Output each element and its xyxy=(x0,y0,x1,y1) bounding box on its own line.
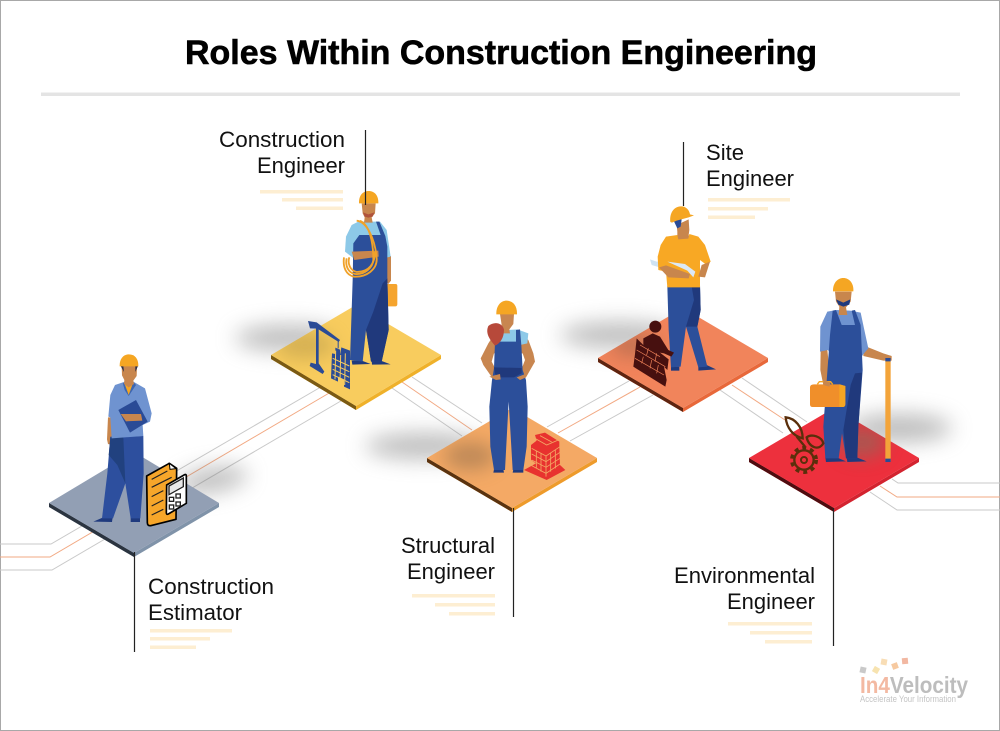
icon: document and calculator xyxy=(147,463,186,526)
figure: structural engineer xyxy=(481,301,535,473)
label: structural engineer: Engineer xyxy=(407,559,495,584)
label: construction estimator: Construction xyxy=(148,574,274,599)
logo: In4Velocity xyxy=(859,658,968,705)
label: site engineer: Engineer xyxy=(706,166,794,191)
soft drop shadows behind platforms xyxy=(174,322,952,498)
title divider xyxy=(41,92,960,96)
figure: construction engineer xyxy=(344,191,397,365)
platform: construction engineer xyxy=(271,305,441,410)
platform: structural engineer xyxy=(427,408,597,512)
icon: brick building xyxy=(524,433,565,480)
figure: environmental engineer xyxy=(810,278,892,462)
figure: site engineer xyxy=(650,206,716,371)
platform: environmental engineer xyxy=(749,408,919,512)
label: structural engineer xyxy=(401,508,514,617)
label: construction engineer xyxy=(219,127,366,210)
label: environmental engineer: Environmental xyxy=(674,563,815,588)
connector circuit lines xyxy=(0,377,1000,570)
title: Roles Within Construction Engineering xyxy=(185,34,817,72)
icon: crane and tower xyxy=(308,321,350,389)
figure: construction estimator xyxy=(93,354,152,522)
label: construction estimator xyxy=(134,552,274,652)
icon: gear and leaf xyxy=(786,417,823,472)
label: environmental engineer: Engineer xyxy=(727,589,815,614)
logo: In4Velocity: Accelerate Your Information xyxy=(860,694,956,705)
platform: estimator xyxy=(49,452,219,557)
label: site engineer: Site xyxy=(706,140,744,165)
icon: bricklayer wall xyxy=(633,321,674,387)
label: environmental engineer xyxy=(674,508,834,646)
label: site engineer xyxy=(684,140,794,219)
platform: site engineer xyxy=(598,308,768,412)
label: structural engineer: Structural xyxy=(401,533,495,558)
label: construction engineer: Construction xyxy=(219,127,345,152)
label: construction engineer: Engineer xyxy=(257,153,345,178)
logo: In4Velocity: In4Velocity xyxy=(860,672,968,698)
label: construction estimator: Estimator xyxy=(148,600,242,625)
